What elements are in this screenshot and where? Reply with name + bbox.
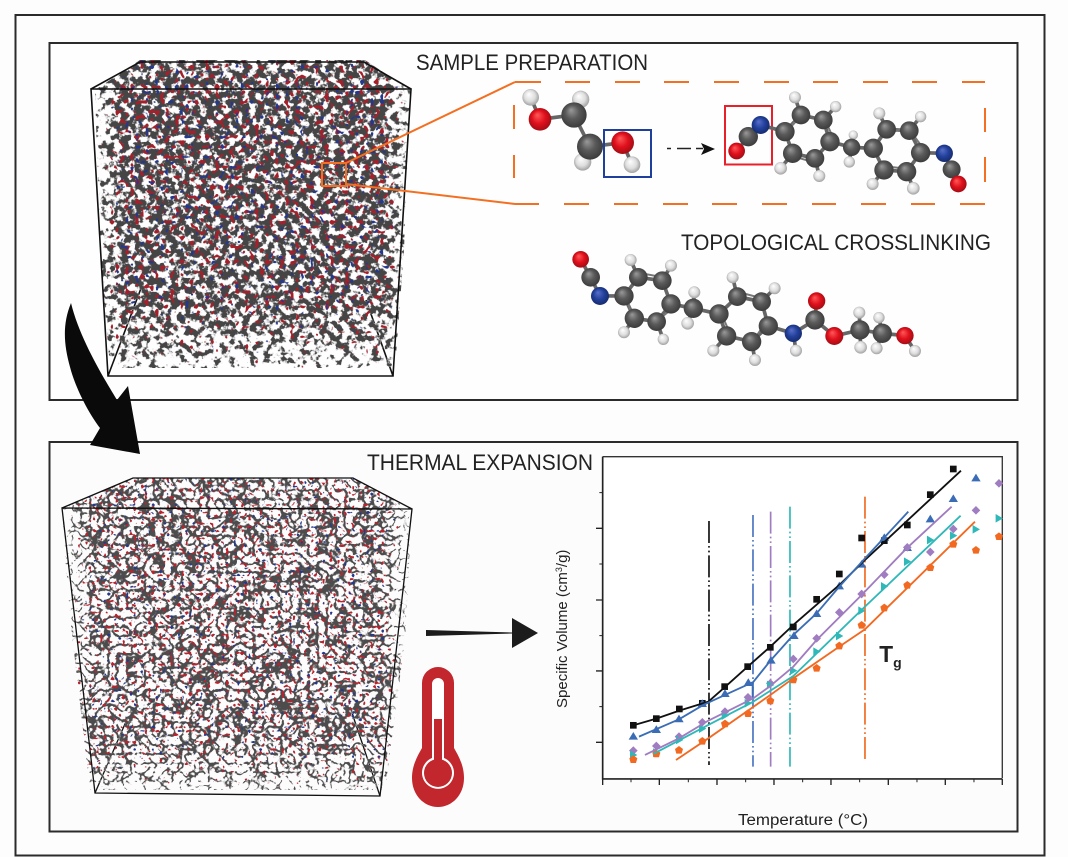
plot area [596, 457, 1003, 785]
series markers: blue triangles [629, 474, 981, 740]
y axis label: /g) [554, 550, 571, 567]
molecular simulation cube: after expansion [58, 476, 416, 796]
y axis label: Specific Volume (cm [554, 572, 571, 708]
chart: specific volume vs temperature [554, 457, 1003, 829]
Tg reference lines [709, 497, 865, 767]
fit lines [633, 471, 975, 760]
blue box: hydroxyl group [604, 130, 651, 177]
y axis label: 3 [554, 567, 564, 572]
Tg label: g [893, 654, 902, 670]
series markers: black squares [630, 466, 957, 729]
icon: thermometer [412, 667, 464, 807]
series markers: purple diamonds [629, 479, 1003, 755]
heading: topological crosslinking: TOPOLOGICAL CROSSLINKING [681, 230, 991, 255]
molecule: diisocyanate [728, 91, 967, 195]
heading: sample preparation: SAMPLE PREPARATION [416, 50, 648, 75]
panel: sample preparation [50, 43, 1018, 400]
panel: thermal expansion [50, 442, 1018, 832]
molecule: crosslinked product [572, 251, 921, 366]
series markers: teal triangles [630, 514, 1003, 759]
molecular simulation cube: before expansion [90, 58, 415, 378]
arrow: heat to graph [426, 618, 538, 648]
series markers: orange pentagons [629, 532, 1003, 763]
heading: thermal expansion: THERMAL EXPANSION [367, 450, 593, 475]
red box: isocyanate group [725, 106, 772, 164]
dashed reaction arrow [667, 143, 715, 155]
x axis label: Temperature (°C) [738, 812, 868, 829]
Tg label: T [879, 641, 893, 667]
zoom callout: orange selection box and leader lines [322, 82, 985, 204]
molecule: ethylene glycol [522, 89, 640, 173]
arrow: curved process arrow [65, 303, 140, 454]
